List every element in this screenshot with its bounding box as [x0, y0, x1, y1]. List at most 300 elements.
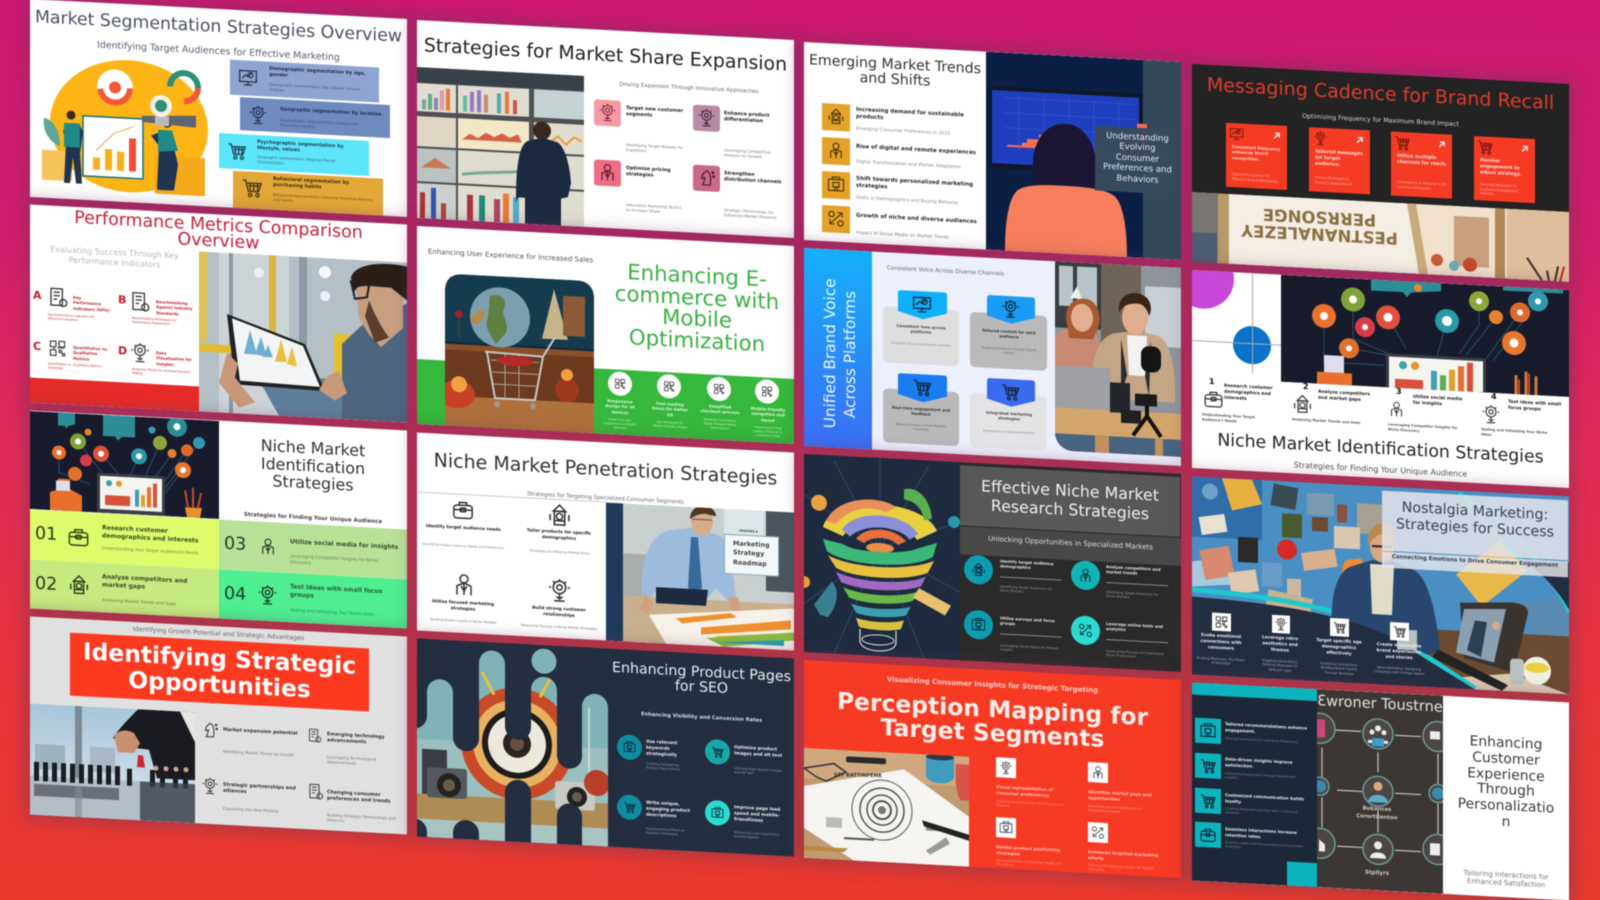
- item: visual representation: Understanding Consumer Preferences and Mapping: [996, 799, 1064, 808]
- icon: arrow: [1273, 132, 1281, 140]
- icon: monitor: [1229, 127, 1244, 141]
- subtitle: Driving Expansion Through Innovative Approaches: [619, 82, 759, 95]
- icon: teal circle: [617, 794, 642, 820]
- card: multiple channels: Consistency in Messaging for Lasting Impressions: [1397, 180, 1447, 190]
- item: market expansion: Market expansion potential: [223, 728, 297, 737]
- icon: arrow: [1356, 136, 1364, 144]
- slide: Messaging Cadence for Brand Recall: [1192, 64, 1569, 282]
- item: target demographics: Identify target audience demographics: [1000, 558, 1053, 570]
- photo caption: centre node: [1337, 803, 1417, 823]
- icon: qr circle: [755, 379, 779, 404]
- icon: teal tile: [1195, 753, 1221, 779]
- icon: document: [307, 782, 324, 801]
- slide: Market Segmentation Strategies Overview: [30, 0, 407, 217]
- item: page speed: Enhancing User Experience and Navigation: [734, 830, 779, 840]
- icon: person: [1388, 398, 1405, 420]
- item 4: Testing and Validating Your Niche Ideas: [1481, 427, 1547, 437]
- card: consistent tone: Consistent tone across platforms: [896, 323, 946, 335]
- item A: KPIs: Key: [73, 295, 81, 300]
- subtitle band: Connecting Emotions to Drive Consumer Engagement: [1392, 554, 1558, 569]
- icon: teal tile: [1195, 822, 1221, 848]
- item: write descriptions: Write unique, engaging product descriptions: [646, 801, 690, 819]
- icon: gear: [547, 577, 572, 604]
- icon: dollar: [547, 502, 572, 529]
- icon: qr circle: [707, 376, 731, 402]
- photo caption: bottom node: Stpllyrs: [1365, 870, 1389, 877]
- title: Overview: [178, 229, 259, 253]
- slide: Emerging Market Trends and Shifts: [804, 42, 1181, 260]
- item: competitors and trends: Analyze competitors and market trends: [1106, 564, 1160, 576]
- icon: teal circle: [964, 554, 993, 585]
- subtitle: Strategies for Finding Your Unique Audience: [244, 512, 382, 525]
- item 4: 4: [1491, 392, 1497, 401]
- item: navigation and layout: [750, 378, 794, 444]
- item: online tools and analytics: [1071, 615, 1176, 671]
- title: Market Segmentation Strategies Overview: [35, 7, 402, 47]
- cell 04: [219, 570, 407, 628]
- cell 01: Understanding Your Target Audience's Needs: [102, 546, 198, 556]
- icon: teal circle: [705, 739, 730, 765]
- decoration: blue circle: [1233, 325, 1271, 365]
- item: partnerships: Expanding into New Markets: [223, 806, 279, 814]
- side band with vertical title: [804, 248, 872, 450]
- card: consistent frequency: Optimal Frequency for Effective Brand Messaging: [1232, 172, 1277, 183]
- title banner: Opportunities: [128, 666, 311, 703]
- item A: KPIs: A: [33, 289, 42, 302]
- item: responsive design: Enhancing User Experience on Mobile Devices: [604, 417, 636, 430]
- icon: chess tile: [693, 165, 720, 192]
- title: Enhancing E-: [627, 260, 767, 293]
- subtitle: Evaluating Success Through Key: [50, 245, 179, 260]
- item: page speed: [705, 800, 794, 852]
- subtitle band: [1382, 552, 1568, 577]
- icon: hub: [1314, 130, 1328, 146]
- cell 01: [30, 510, 219, 570]
- panel: geographic card: Psychographic Segmentation: Lifestyle and Personality Insights: [280, 118, 358, 129]
- title: Mobile: [662, 305, 732, 334]
- item: customized communication: Creating Memorable Journeys with Customized Solutions: [1225, 806, 1298, 815]
- item: fast loading: [652, 372, 698, 439]
- item: fast loading: Fast loading times for better UX: [652, 401, 688, 417]
- slide: Nostalgia Marketing: [1192, 476, 1569, 694]
- item 2: Analyzing Market Trends and Gaps: [1292, 417, 1360, 425]
- callout: understanding consumers: Evolving: [1119, 142, 1156, 154]
- item: memorable experiences: Create memorable brand experiences and stories: [1376, 642, 1422, 661]
- item: retro aesthetics: Targeting Generations: Tailoring Messages for Different Ages: [1262, 658, 1298, 672]
- item: digital experiences: Rise of digital and remote experiences: [856, 144, 976, 156]
- slide: Enhancing E-commerce with Mobile Optimization: [417, 226, 794, 444]
- title: commerce with: [615, 281, 779, 315]
- icon: qr circle: [657, 374, 681, 399]
- item: online tools and analytics: Conducting Surveys to Understand Niche Preferences: [1106, 649, 1164, 659]
- card: consistent tone: [883, 289, 959, 366]
- item: customized communication: Customized communication builds loyalty.: [1225, 792, 1304, 804]
- vertical title: Unified Brand Voice: [821, 278, 839, 429]
- cell 04: 04: [224, 584, 246, 605]
- item: target demographics: Identifying Target Audiences for Niche Markets: [1000, 584, 1052, 594]
- item: target demographics: [964, 554, 1069, 610]
- item 2: [1292, 381, 1382, 432]
- icon: hub: [249, 105, 267, 125]
- icon: gears: [130, 342, 150, 364]
- title: Optimization: [629, 325, 765, 358]
- item: digital experiences: [821, 136, 976, 170]
- card: tailored content: [970, 294, 1047, 371]
- title panel: [960, 465, 1180, 537]
- photo: man viewing chart wall: [416, 66, 585, 227]
- title: Strategies for Success: [1396, 516, 1554, 540]
- icon: qr circle: [608, 371, 632, 396]
- item: customized communication: [1195, 788, 1315, 820]
- item: tailored recommendations: Tailoring Interactions for Individual Preferences: [1225, 736, 1298, 744]
- title: Strategies: [272, 471, 354, 495]
- item: optimize images: Utilizing High-Quality Images and Alt Text: [734, 766, 782, 776]
- item: competitors and trends: Identifying Target Audiences for Niche Markets: [1106, 590, 1158, 600]
- title: Enhancing: [1470, 733, 1542, 753]
- item: product positioning: Leveraging Data in Consumer Needs and Perceptions: [996, 858, 1062, 867]
- item B: benchmarking: Against Industry: [156, 304, 192, 311]
- item: relevant keywords: [617, 734, 705, 783]
- item: targeted marketing: [1088, 822, 1178, 877]
- title: [1443, 733, 1569, 834]
- panel: demographic card: [230, 60, 379, 102]
- title: Perception Mapping for: [837, 687, 1148, 731]
- cell 02: 02: [35, 574, 57, 595]
- item B: benchmarking: [118, 291, 193, 326]
- title: [809, 52, 981, 89]
- icon: arrow: [1521, 145, 1529, 153]
- item: personalized marketing: Shifts in Demographics and Buying Behavior: [856, 196, 959, 206]
- icon: briefcase: [450, 498, 476, 522]
- item: target new customer segments: Target new customer segments: [626, 106, 683, 119]
- subtitle: [50, 245, 179, 269]
- item 3: Leveraging Competitor Insights for Niche Discovery: [1388, 422, 1457, 433]
- teal corner square: [1287, 862, 1317, 887]
- slide: Enhancing Product Pages for SEO: [417, 638, 794, 856]
- icon: teal circle: [705, 800, 730, 826]
- title panel: [1382, 491, 1568, 560]
- cell 02: Analyzing Market Trends and Gaps: [102, 598, 176, 607]
- decoration: purple circle: [1172, 245, 1234, 310]
- item: navigation and layout: Mobile-friendly navigation and layout: [751, 406, 785, 423]
- sign text: reversed: [1240, 205, 1398, 248]
- item: seamless interactions: Building Loyalty with Personalized Communication Strategies: [1225, 840, 1303, 849]
- item: sustainable products: Emerging Consumer Preferences in 2023: [856, 127, 950, 137]
- item: memorable experiences: [1373, 621, 1425, 684]
- slide: Enhancing Customer Experience Through Personalization: [1192, 682, 1569, 900]
- title: Target Segments: [881, 713, 1104, 753]
- item: age demographics: Target specific age demographics effectively: [1316, 638, 1362, 657]
- icon: documents: [132, 291, 150, 312]
- panel: dark list: [1192, 682, 1317, 887]
- item: customer relationships: [517, 576, 602, 635]
- item D: data visualization: Analyzing Trends for Informed Decision Making: [132, 367, 191, 376]
- card: monitor engagement: Monitor engagement to adjust strategy.: [1480, 158, 1521, 178]
- icon: board tile: [822, 171, 850, 199]
- item C: quantitative vs qualitative: Qualitative: [73, 350, 97, 356]
- callout: understanding consumers: [1095, 125, 1180, 195]
- photo: perception map on desk: SET RATTINPEME: [834, 772, 883, 779]
- card: tailored messages: Tailored messages for target audience.: [1315, 150, 1363, 168]
- card: consistent tone: Consistent Tone Across Diverse Channels: [891, 341, 951, 348]
- cell 03: 03: [224, 534, 246, 555]
- item: product positioning: [996, 817, 1086, 872]
- panel: geographic card: Geographic segmentation by location: [280, 107, 381, 118]
- title: Enhancing Product Pages: [612, 660, 791, 685]
- item: market gaps: Identifies market gaps and opportunities: [1088, 789, 1152, 801]
- title: [1382, 499, 1568, 541]
- title: Strategies for Market Share Expansion: [424, 34, 787, 76]
- item: competitors and trends: [1071, 560, 1176, 616]
- panel: demographic card: Demographic segmentation by age, gender: [269, 67, 366, 79]
- title: and Shifts: [860, 69, 930, 89]
- icon: gear tile: [594, 99, 621, 127]
- slide: Niche Market Identification Strategies (grid): [30, 410, 407, 628]
- item: optimize images: [705, 739, 794, 787]
- title: for SEO: [675, 678, 728, 696]
- title: [219, 435, 407, 497]
- item: product positioning: Guides product positioning strategies: [996, 844, 1060, 856]
- card: integrated strategies: [970, 377, 1047, 451]
- item: data-driven insights: Enhancing Engagement Through Data-Driven Insights: [1225, 771, 1295, 780]
- item: tailor products: Tailor products for specific demographics: [527, 528, 591, 542]
- item: responsive design: Responsive design for all devices: [605, 398, 635, 415]
- item 4: Test ideas with small focus groups: [1508, 400, 1561, 413]
- cell 01: 01: [35, 524, 57, 545]
- item: niche audiences: Growth of niche and diverse audiences: [856, 213, 977, 225]
- icon: gear: [257, 584, 278, 607]
- photo caption: centre node: Bukances: [1362, 806, 1392, 813]
- cell 03: Leveraging Competitor Insights for Niche Discovery: [290, 554, 378, 566]
- sign: marketing strategy roadmap: Strategy: [733, 549, 764, 558]
- callout: understanding consumers: Behaviors: [1116, 173, 1159, 185]
- item: emotional connections: [1196, 612, 1248, 674]
- item: age demographics: Emotional Connections: Building Brand Loyalty Through Nostalgia: [1320, 661, 1358, 676]
- item: targeted marketing: Tailoring Marketing Strategies for Specific Segments: [1088, 863, 1154, 872]
- icon: white tile: [1088, 822, 1108, 843]
- icon: dollar: [1292, 393, 1313, 415]
- item: enhance product differentiation: [692, 104, 771, 160]
- subtitle: Strategies for Targeting Specialized Consumer Segments: [527, 491, 684, 506]
- icon: cart: [1477, 140, 1494, 156]
- item: optimize images: Optimize product images and alt text: [734, 745, 782, 759]
- subtitle: Optimizing Frequency for Maximum Brand Impact: [1302, 113, 1459, 128]
- item D: data visualization: Data: [156, 350, 166, 356]
- sign: marketing strategy roadmap: [724, 534, 779, 577]
- photo: globe with shopping cart: [444, 274, 595, 434]
- title: n: [1502, 814, 1510, 830]
- icon: cart: [228, 142, 247, 161]
- cell 04: Testing and Validating Your Niche Ideas: [290, 608, 374, 618]
- title: Personalizatio: [1458, 796, 1554, 817]
- subtitle: Identifying Growth Potential and Strategic Advantages: [133, 626, 304, 642]
- item C: quantitative vs qualitative: C: [33, 340, 41, 353]
- cell 02: Analyze competitors and market gaps: [102, 573, 187, 591]
- item: customer relationships: Measuring Success in Niche Market Strategies: [521, 623, 597, 631]
- item B: benchmarking: Benchmarking: [156, 299, 188, 306]
- photo: couple with camera at desk: [1055, 261, 1181, 457]
- title: Effective Niche Market: [981, 476, 1159, 505]
- item: surveys and focus groups: [964, 609, 1069, 665]
- item: emotional connections: Evoke emotional connections with consumers: [1200, 633, 1242, 651]
- item: online tools and analytics: Leverage online tools and analytics: [1106, 621, 1163, 632]
- callout: understanding consumers: Consumer: [1116, 152, 1159, 165]
- title banner: [70, 633, 369, 711]
- item: digital experiences: Digital Transformation and Market Adaptation: [856, 160, 961, 170]
- item C: quantitative vs qualitative: Quantitative vs.: [73, 345, 108, 352]
- item C: quantitative vs qualitative: Quantitative vs. Qualitative Metrics Explained: [48, 361, 101, 370]
- item: data-driven insights: [1195, 753, 1315, 785]
- panel: behavioral card: Behavioral Segmentation: Consumer Purchase Patterns and Trends: [273, 193, 373, 203]
- photo: nostalgic collage with man and laptop: [1192, 476, 1569, 694]
- item: fast loading: Key Strategies for Mobile-Friendly Design: [653, 420, 687, 429]
- tab icon: [898, 373, 947, 404]
- title: [804, 687, 1181, 755]
- item D: data visualization: [118, 342, 192, 376]
- card: tailored content: Tailored content for each audience: [982, 327, 1036, 340]
- slide: Niche Market Penetration Strategies: CREATING A: [739, 529, 758, 534]
- icon: tile: [1390, 622, 1409, 641]
- icon: documents: [50, 286, 68, 308]
- item: relevant keywords: Crafting Compelling Product Descriptions: [646, 762, 680, 772]
- subtitle: Enhancing User Experience for Increased Sales: [428, 248, 593, 264]
- card: real-time engagement: Measuring Impact of Multi-Platform Campaigns: [896, 422, 946, 432]
- item 3: [1388, 386, 1478, 437]
- icon: board tile: [594, 159, 621, 187]
- card: consistent frequency: Consistent frequency enhances brand recognition.: [1232, 144, 1280, 161]
- vertical title: Across Platforms: [841, 290, 859, 419]
- icon: white tile: [996, 817, 1016, 838]
- sign text: reversed: PERRSONGE: [1263, 205, 1376, 230]
- item A: KPIs: [32, 286, 110, 322]
- icon: tile: [1272, 615, 1290, 634]
- item: market gaps: [1088, 762, 1178, 819]
- slide: Strategies for Market Share Expansion: [417, 20, 794, 238]
- item: emerging technology: Leveraging Technological Advancements: [327, 754, 376, 766]
- illustration: team with chart and telescope: [41, 59, 209, 197]
- cell 03: Utilize social media for insights: [290, 538, 398, 551]
- item: target new customer segments: [594, 99, 684, 153]
- slide: Perception Mapping for Target Segments: [804, 660, 1181, 878]
- icon: briefcase: [1202, 389, 1225, 410]
- funnel illustration panel: [804, 454, 960, 660]
- item: optimize pricing strategies: [593, 158, 682, 214]
- item: memorable experiences: Retro Aesthetics: Designing Campaigns with Vintage Appeal: [1374, 665, 1424, 676]
- item: emerging technology: [307, 726, 407, 771]
- item: write descriptions: [617, 794, 705, 847]
- item: partnerships: [201, 777, 301, 822]
- subtitle: Enhancing Visibility and Conversion Rates: [641, 711, 762, 724]
- icon: chess: [201, 721, 219, 740]
- item 3: Utilize social media for insights: [1413, 395, 1462, 407]
- item B: benchmarking: Benchmarking Techniques for Performance Assessment: [132, 316, 176, 326]
- item: customer relationships: Build strong customer relationships: [532, 606, 586, 619]
- item: niche audiences: [821, 204, 978, 241]
- slide: Niche Market Penetration Strategies: [417, 432, 794, 650]
- card: multiple channels: Utilize multiple channels for reach.: [1397, 154, 1447, 168]
- icon: dollar tile: [822, 103, 850, 131]
- card: real-time engagement: Real-time engagement and feedback: [892, 405, 950, 417]
- card: tailored content: Engaging Audiences Through Tailored Content: [982, 345, 1036, 355]
- icon: gear: [201, 777, 219, 796]
- cell 02: [30, 560, 219, 619]
- tab icon: [987, 378, 1035, 408]
- item 1: 1: [1209, 377, 1215, 386]
- card: integrated strategies: Integrated marketing strategies: [986, 410, 1032, 422]
- item: identify audience: [421, 497, 506, 553]
- item: sustainable products: [821, 102, 964, 137]
- title: [960, 476, 1180, 525]
- item: enhance product differentiation: Leveraging Competitive Analysis for Growth: [724, 147, 771, 160]
- green band: [417, 359, 794, 444]
- card: consistent frequency: [1226, 123, 1287, 190]
- subtitle band: Unlocking Opportunities in Specialized Markets: [988, 535, 1153, 551]
- cell 03: [219, 520, 407, 579]
- item: strengthen distribution channels: Strategic Partnerships for Enhanced Market Presence: [724, 207, 777, 220]
- item: simplified checkout: Simplified checkout process: [700, 403, 740, 415]
- item: responsive design: [604, 371, 636, 430]
- panel: behavioral card: Behavioral segmentation by purchasing habits: [273, 177, 349, 191]
- photo: man with strategy roadmap: [606, 503, 794, 650]
- panel: customer journey network photo: [1317, 689, 1443, 894]
- icon: teal circle: [964, 609, 993, 640]
- card: tailored messages: Timing Strategies to Enhance Brand Recall: [1315, 176, 1352, 186]
- title: [615, 260, 779, 358]
- item: age demographics: [1314, 617, 1366, 680]
- subtitle: Identifying Target Audiences for Effective Marketing: [97, 40, 340, 63]
- item: tailored recommendations: Tailored recommendations enhance engagement.: [1225, 721, 1307, 733]
- item C: quantitative vs qualitative: [32, 340, 108, 370]
- item: focused marketing: [421, 570, 506, 629]
- subtitle: Performance Indicators: [69, 256, 160, 269]
- item 2: 2: [1303, 382, 1309, 391]
- title: Messaging Cadence for Brand Recall: [1207, 74, 1554, 114]
- photo: technology network art: [30, 410, 219, 520]
- panel: psychographic card: [219, 133, 369, 176]
- sign text: reversed: PESTNANALEZEY: [1241, 221, 1398, 248]
- photo heading: garbled journey text: Ɛwroner Toustrne: [1317, 693, 1443, 716]
- item: seamless interactions: Seamless interactions increase retention rates.: [1225, 826, 1297, 839]
- card: multiple channels: [1391, 132, 1452, 199]
- item: surveys and focus groups: Utilize surveys and focus groups: [1000, 615, 1055, 626]
- icon: person tile: [822, 137, 850, 165]
- item: strengthen distribution channels: Strengthen distribution channels: [724, 171, 781, 186]
- item: visual representation: [996, 757, 1086, 814]
- item: niche audiences: Impact of Social Media on Market Trends: [856, 231, 949, 241]
- tab icon: [987, 295, 1035, 325]
- sign: marketing strategy roadmap: Roadmap: [733, 558, 767, 568]
- icon: arrow: [1438, 140, 1446, 148]
- icon: document: [307, 726, 322, 745]
- item: write descriptions: Implementing Effective Keyword Strategies: [646, 827, 684, 837]
- icon: teal circle: [617, 734, 642, 760]
- item 4: [1481, 391, 1569, 442]
- item: optimize pricing strategies: Innovative Marketing Tactics to Increase Share: [626, 202, 681, 214]
- item A: KPIs: Performance: [73, 300, 101, 307]
- item: focused marketing: Building Brand Loyalty in Niche Markets: [431, 617, 496, 625]
- item C: quantitative vs qualitative: Metrics: [73, 355, 89, 361]
- title: Research Strategies: [991, 495, 1149, 523]
- item: market expansion: Identifying Market Trends for Growth: [223, 749, 294, 757]
- item: simplified checkout: [702, 375, 748, 442]
- red band: [30, 378, 199, 411]
- item: target new customer segments: Identifying Target Markets for Expansion: [626, 142, 683, 153]
- title banner: Identifying Strategic: [83, 637, 356, 680]
- tab icon: [898, 290, 947, 321]
- panel: demographic card: Demographic Segmentation: Age, Gender, Income Analysis: [269, 83, 360, 92]
- icon: swap tile: [822, 205, 850, 233]
- title: Identification: [261, 453, 365, 478]
